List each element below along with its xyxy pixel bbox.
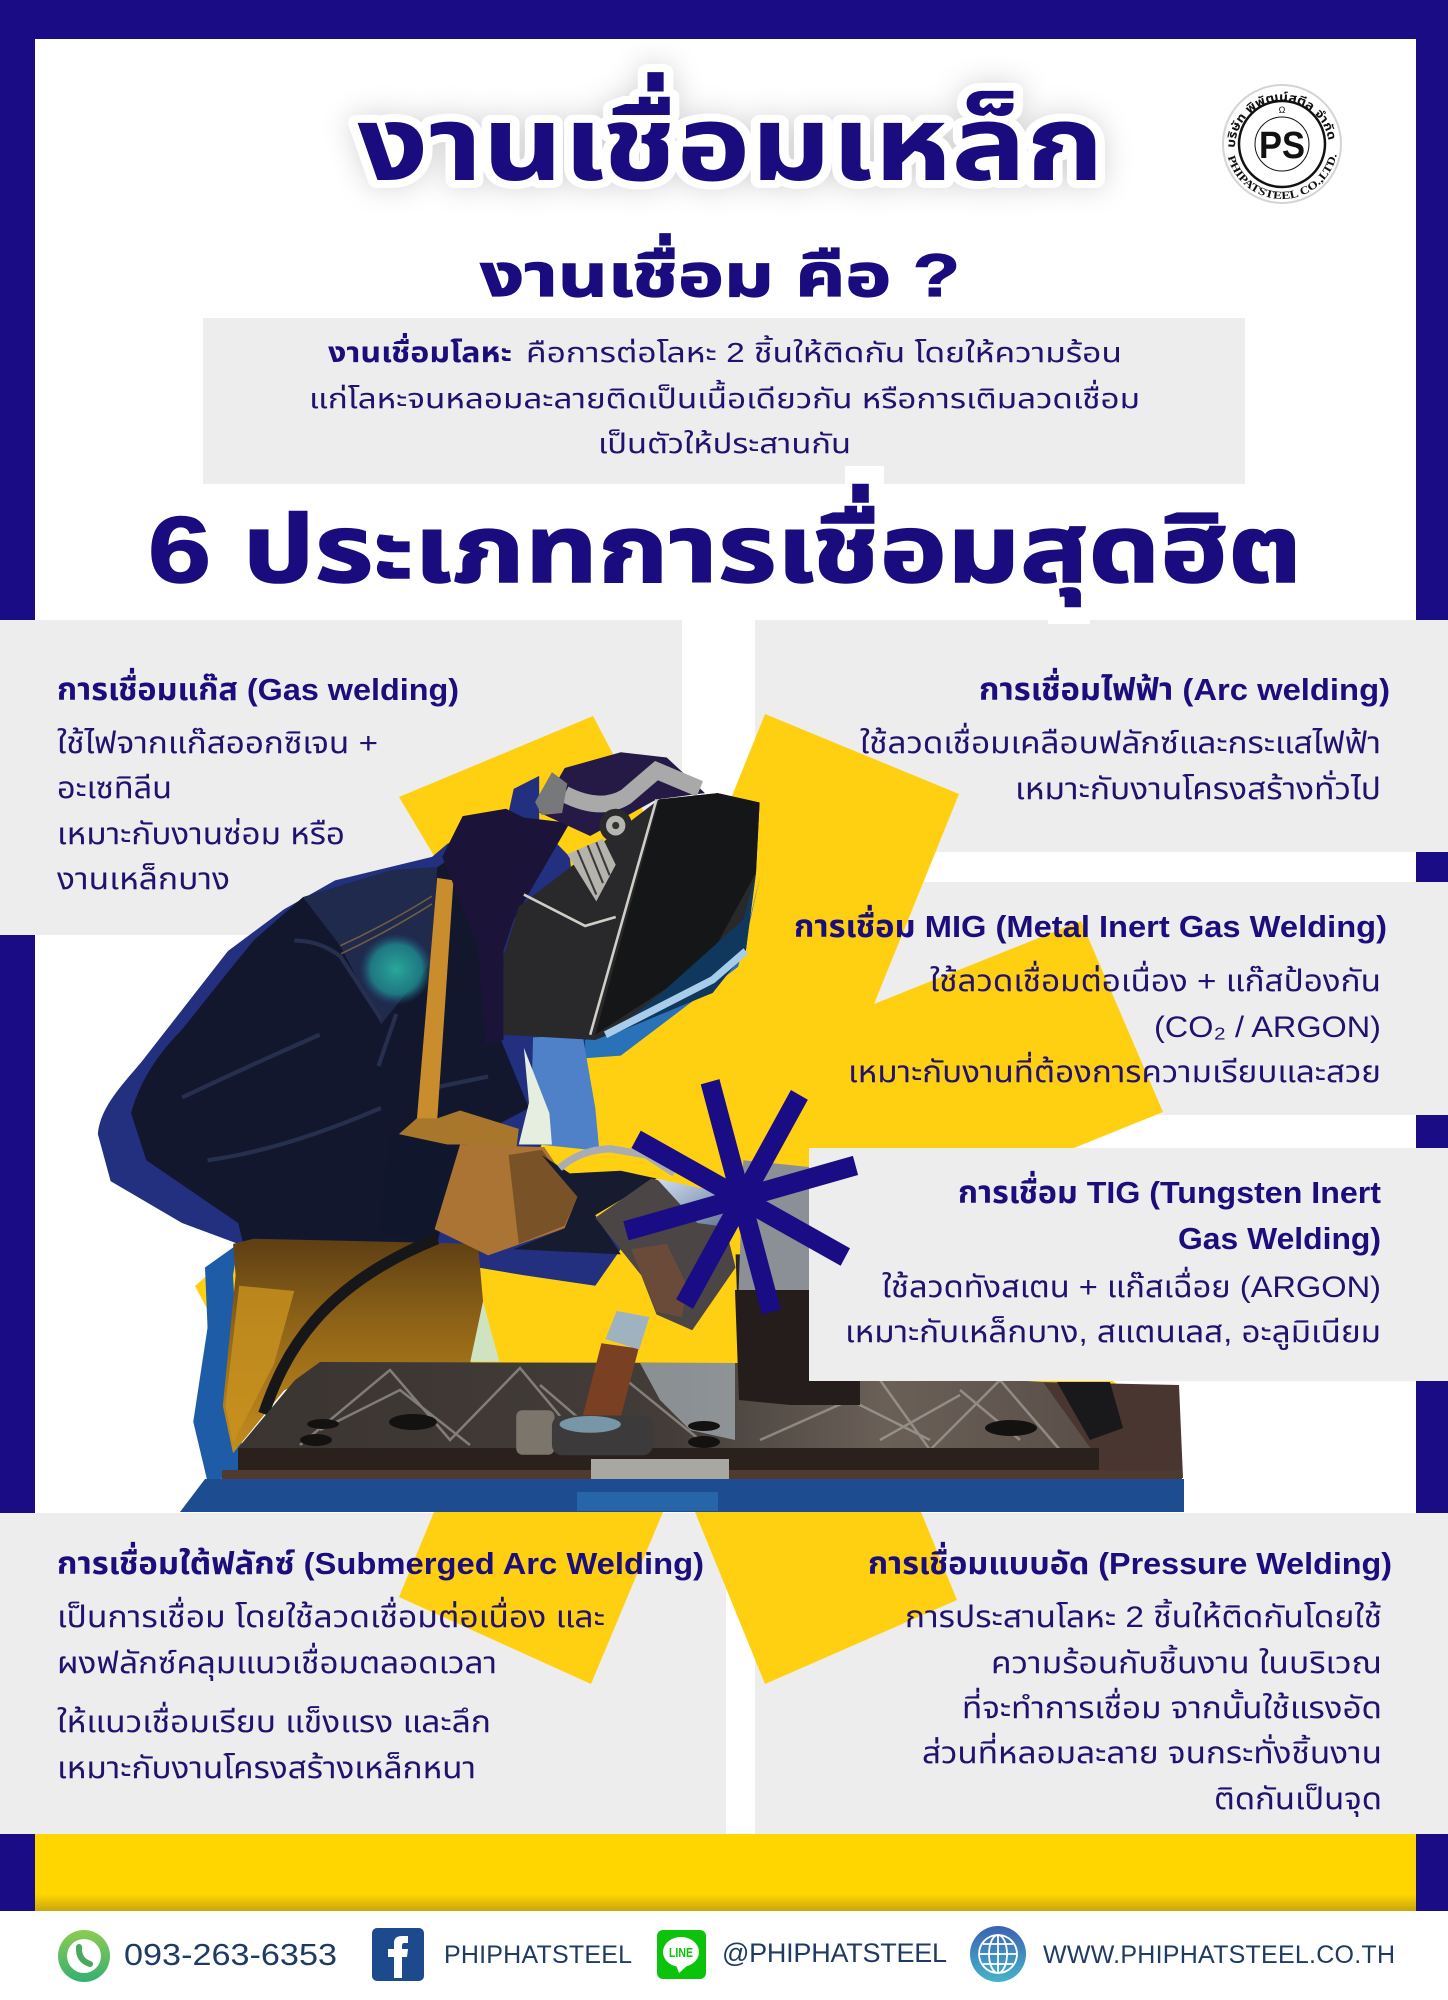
subtitle: งานเชื่อม คือ ? [480, 233, 960, 309]
apron strap [417, 878, 453, 1121]
panel: pressure welding background [755, 1513, 1448, 1834]
text: gas welding: ใช้ไฟจากแก๊สออกซิเจน + [57, 727, 378, 760]
text: gas welding: งานเหล็กบาง [57, 863, 230, 896]
text: MIG welding [794, 904, 1387, 1089]
navy asterisk [626, 1082, 856, 1312]
head buckle [535, 772, 567, 815]
blue cutout shadow upper [98, 776, 621, 1286]
scarf [442, 809, 570, 1045]
text: pressure welding: การเชื่อมแบบอัด (Pressure Welding) [868, 1541, 1392, 1581]
visor lit side [606, 873, 756, 1037]
text: pressure welding: ที่จะทำการเชื่อม จากนั้นใช้แรงอัด [962, 1687, 1382, 1725]
intro panel background [203, 318, 1245, 484]
plate front edge [238, 1448, 1099, 1470]
welding block [736, 1254, 861, 1403]
text: gas welding: เหมาะกับงานซ่อม หรือ [57, 818, 345, 851]
panel: arc welding background [755, 620, 1448, 852]
dark block [735, 1290, 860, 1405]
apron bright left [225, 1286, 294, 1443]
intro text: งานเชื่อมโลหะ [328, 332, 512, 368]
text: TIG welding: เหมาะกับเหล็กบาง, สแตนเลส, อะลูมิเนียม [845, 1316, 1381, 1350]
jacket creases [182, 941, 488, 1160]
jacket stitching [340, 896, 432, 954]
plate scratches [300, 1368, 1060, 1450]
blue shirt [532, 1035, 599, 1151]
white title notches [845, 466, 1090, 624]
yellow band [35, 1834, 1416, 1911]
welding torch [560, 1149, 674, 1173]
hood cap [539, 752, 705, 836]
company logo [1222, 84, 1342, 204]
intro text: คือการต่อโลหะ 2 ชิ้นให้ติดกัน โดยให้ความร้อน [526, 335, 1122, 368]
blue rim at helmet [585, 873, 761, 1058]
text: arc welding [860, 667, 1390, 806]
text: MIG welding: ใช้ลวดเชื่อมต่อเนื่อง + แก๊สป้องกัน [930, 960, 1381, 998]
plate underside [222, 1470, 1182, 1479]
text: arc welding: การเชื่อมไฟฟ้า (Arc welding) [979, 667, 1390, 707]
panel: gas welding background [0, 620, 682, 935]
text: TIG welding: การเชื่อม TIG (Tungsten Inert [958, 1170, 1381, 1210]
steel bar [591, 1459, 729, 1479]
text: submerged arc welding: ให้แนวเชื่อมเรียบ แข็งแรง และลึก [57, 1701, 491, 1739]
text: MIG welding: เหมาะกับงานที่ต้องการความเรียบและสวย [848, 1051, 1381, 1089]
text: submerged arc welding: ผงฟลักซ์คลุมแนวเชื่อมตลอดเวลา [57, 1642, 497, 1681]
table right dark side [1040, 1382, 1183, 1478]
text: submerged arc welding [57, 1541, 704, 1785]
denim jacket [131, 857, 529, 1244]
sleeve cuff [378, 1134, 462, 1241]
main title: งานเชื่อมเหล็ก [357, 72, 1104, 203]
helmet knob [599, 809, 632, 842]
welding cable [264, 1239, 437, 1414]
apron bib [399, 1111, 519, 1150]
text: gas welding: การเชื่อมแก๊ส (Gas welding) [57, 667, 459, 707]
facebook handle: PHIPHATSTEEL [444, 1941, 632, 1969]
dark clamp [1057, 1382, 1123, 1440]
intro text: แก่โลหะจนหลอมละลายติดเป็นเนื้อเดียวกัน หรือการเติมลวดเชื่อม [309, 379, 1140, 414]
intro text [309, 332, 1140, 459]
text: submerged arc welding: เป็นการเชื่อม โดยใช้ลวดเชื่อมต่อเนื่อง และ [57, 1596, 605, 1634]
leather glove [435, 1145, 577, 1255]
text: arc welding: เหมาะกับงานโครงสร้างทั่วไป [1015, 770, 1381, 806]
text: gas welding [57, 667, 459, 896]
helmet edge lines [524, 799, 657, 1035]
phone number: 093-263-6353 [124, 1937, 337, 1972]
hammer [516, 1311, 653, 1455]
plate bright reflection [640, 1363, 735, 1440]
jacket shoulder highlight [303, 867, 437, 1024]
text: pressure welding [868, 1541, 1392, 1817]
hand brown tint [631, 1244, 687, 1317]
icon: phone [58, 1930, 110, 1982]
icon: line: LINE [669, 1945, 693, 1960]
text: submerged arc welding: การเชื่อมใต้ฟลักซ์ (Submerged Arc Welding) [57, 1541, 704, 1581]
icon: facebook [372, 1928, 424, 1981]
icon: line [657, 1930, 706, 1979]
far sleeve [514, 1155, 657, 1254]
plate holes [300, 1414, 1037, 1448]
glove shading [509, 1150, 577, 1244]
head strap [565, 771, 700, 804]
panel: TIG welding background [809, 1148, 1448, 1381]
blue table base [180, 1479, 1184, 1512]
blue cutout shadow lower [193, 1244, 243, 1482]
welding helmet [503, 793, 760, 1040]
text: pressure welding: การประสานโลหะ 2 ชิ้นให้ติดกันโดยใช้ [905, 1598, 1382, 1634]
icon: globe [970, 1926, 1026, 1982]
helmet grille [567, 839, 616, 901]
leather apron [223, 1239, 483, 1453]
panel: MIG welding background [755, 882, 1448, 1115]
welder figure [98, 752, 861, 1482]
steel plate top [238, 1362, 1099, 1460]
lens flare [360, 934, 433, 1005]
welding hand [595, 1179, 736, 1330]
text: submerged arc welding: เหมาะกับงานโครงสร้างเหล็กหนา [57, 1752, 476, 1785]
text: gas welding: อะเซทิลีน [57, 772, 172, 805]
text: MIG welding: การเชื่อม MIG (Metal Inert Gas Welding) [794, 904, 1387, 944]
text: MIG welding: (CO₂ / ARGON) [1154, 1011, 1381, 1044]
helmet dark visor [595, 793, 760, 1035]
logo thai arc: บริษัท พิพัฒน์สตีล จำกัด [1228, 92, 1334, 147]
text: TIG welding: Gas Welding) [1178, 1221, 1381, 1256]
website: WWW.PHIPHATSTEEL.CO.TH [1043, 1941, 1395, 1969]
panel: submerged arc background [0, 1513, 726, 1834]
arc glare [657, 1179, 741, 1228]
visor reflection [606, 951, 746, 1035]
text: pressure welding: ความร้อนกับชิ้นงาน ในบริเวณ [991, 1644, 1382, 1680]
yellow starburst [195, 714, 1163, 1684]
logo english arc: PHIPATSTEEL CO.,LTD. [1228, 154, 1337, 200]
logo monogram: PS [1259, 125, 1305, 167]
text: pressure welding: ติดกันเป็นจุด [1214, 1783, 1382, 1817]
logo symbols: Ω [1279, 105, 1286, 115]
welding table [180, 1290, 1184, 1512]
intro text: เป็นตัวให้ประสานกัน [598, 428, 851, 459]
footer contacts [58, 1926, 1395, 1982]
text: arc welding: ใช้ลวดเชื่อมเคลือบฟลักซ์และกระแสไฟฟ้า [860, 722, 1381, 760]
text: TIG welding: ใช้ลวดทังสเตน + แก๊สเฉื่อย (ARGON) [882, 1266, 1381, 1304]
text: TIG welding [845, 1170, 1381, 1350]
metal sheet [738, 1160, 845, 1312]
base plate [577, 1492, 718, 1511]
section heading: 6 ประเภทการเชื่อมสุดฮิต [148, 484, 1302, 607]
pale reflection [470, 1301, 499, 1362]
text: pressure welding: ส่วนที่หลอมละลาย จนกระทั่งชิ้นงาน [922, 1732, 1382, 1770]
shirt collar [519, 1048, 552, 1145]
line handle: @PHIPHATSTEEL [722, 1938, 947, 1968]
